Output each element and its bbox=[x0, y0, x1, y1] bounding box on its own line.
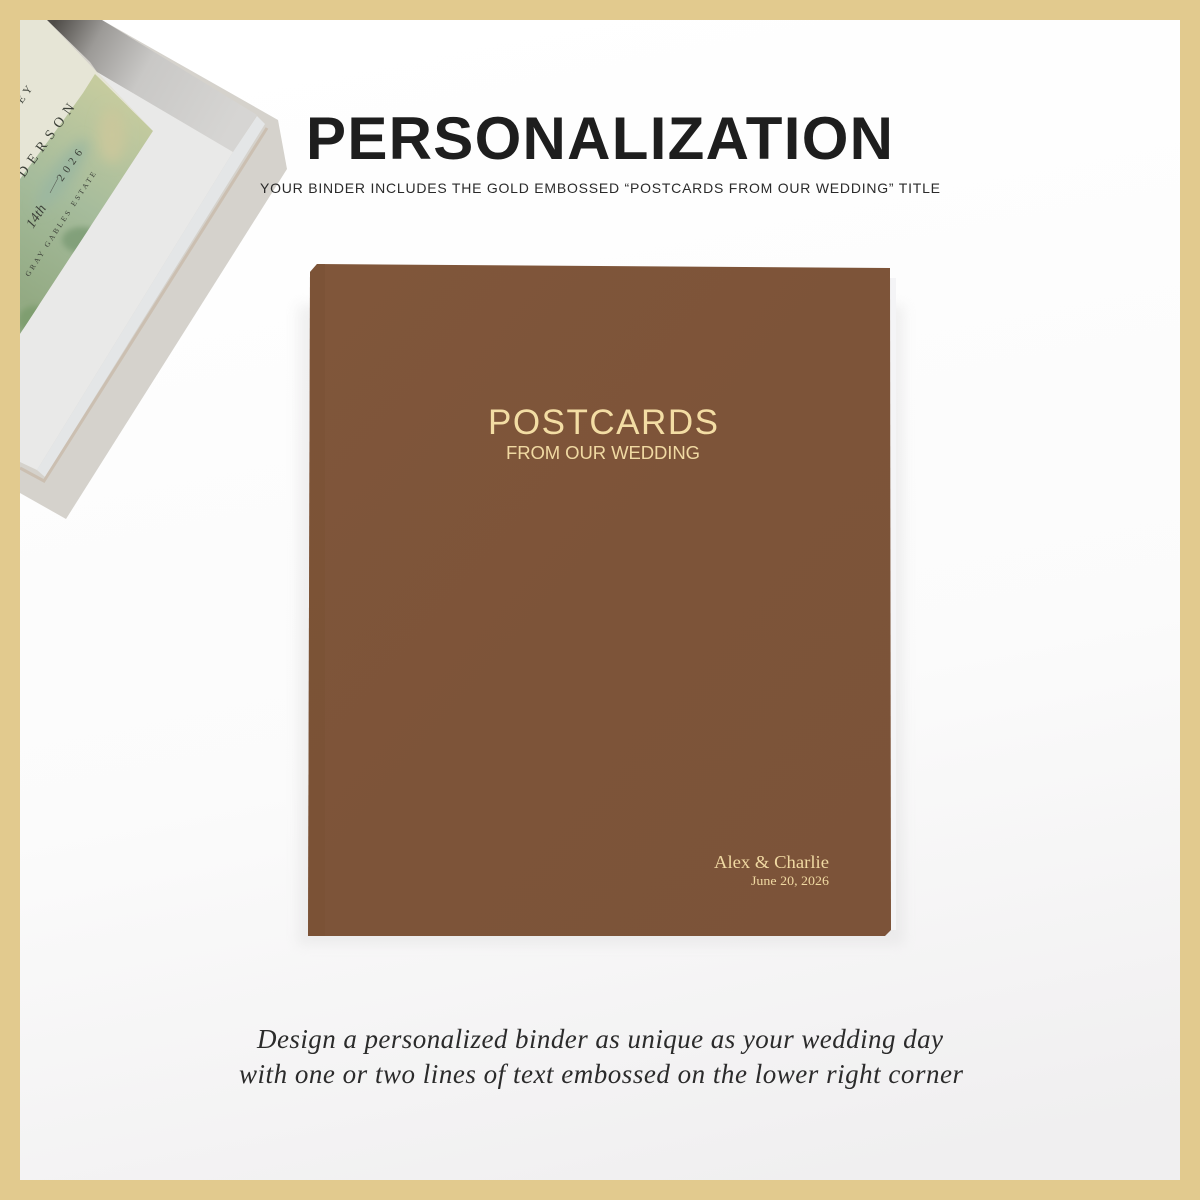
photo: open keepsake box with invitation bbox=[15, 20, 287, 519]
subtitle: YOUR BINDER INCLUDES THE GOLD EMBOSSED “POSTCARDS FROM OUR WEDDING” TITLE bbox=[260, 180, 940, 196]
title: PERSONALIZATION bbox=[306, 105, 893, 172]
binder shadow bbox=[298, 305, 904, 945]
embossed title: POSTCARDS bbox=[488, 403, 718, 442]
caption: Design a personalized binder as unique as your wedding day bbox=[256, 1024, 943, 1054]
caption bbox=[239, 1024, 963, 1089]
caption: with one or two lines of text embossed on the lower right corner bbox=[239, 1059, 963, 1089]
embossed subtitle: FROM OUR WEDDING bbox=[506, 442, 700, 463]
invitation lettering: EY bbox=[15, 80, 37, 106]
box paper floor bbox=[20, 72, 233, 470]
invitation lettering bbox=[20, 84, 96, 276]
box outer shell bbox=[20, 20, 287, 519]
invitation lettering: 2026 bbox=[55, 147, 85, 184]
binder bbox=[298, 264, 904, 945]
box beige seam bbox=[20, 128, 267, 481]
box lid back wall bbox=[47, 20, 257, 152]
invitation lettering: 14th bbox=[24, 202, 50, 231]
embossed date: June 20, 2026 bbox=[751, 873, 830, 888]
embossed names: Alex & Charlie bbox=[714, 852, 829, 872]
invitation lettering: GRAY GABLES ESTATE bbox=[23, 170, 98, 278]
box inner white rim bbox=[37, 116, 265, 477]
invitation lettering: DERSON bbox=[15, 101, 78, 180]
binder pages edge bbox=[888, 278, 896, 930]
invitation card bbox=[15, 20, 153, 334]
binder cover bbox=[308, 264, 891, 936]
binder spine bbox=[308, 264, 325, 936]
